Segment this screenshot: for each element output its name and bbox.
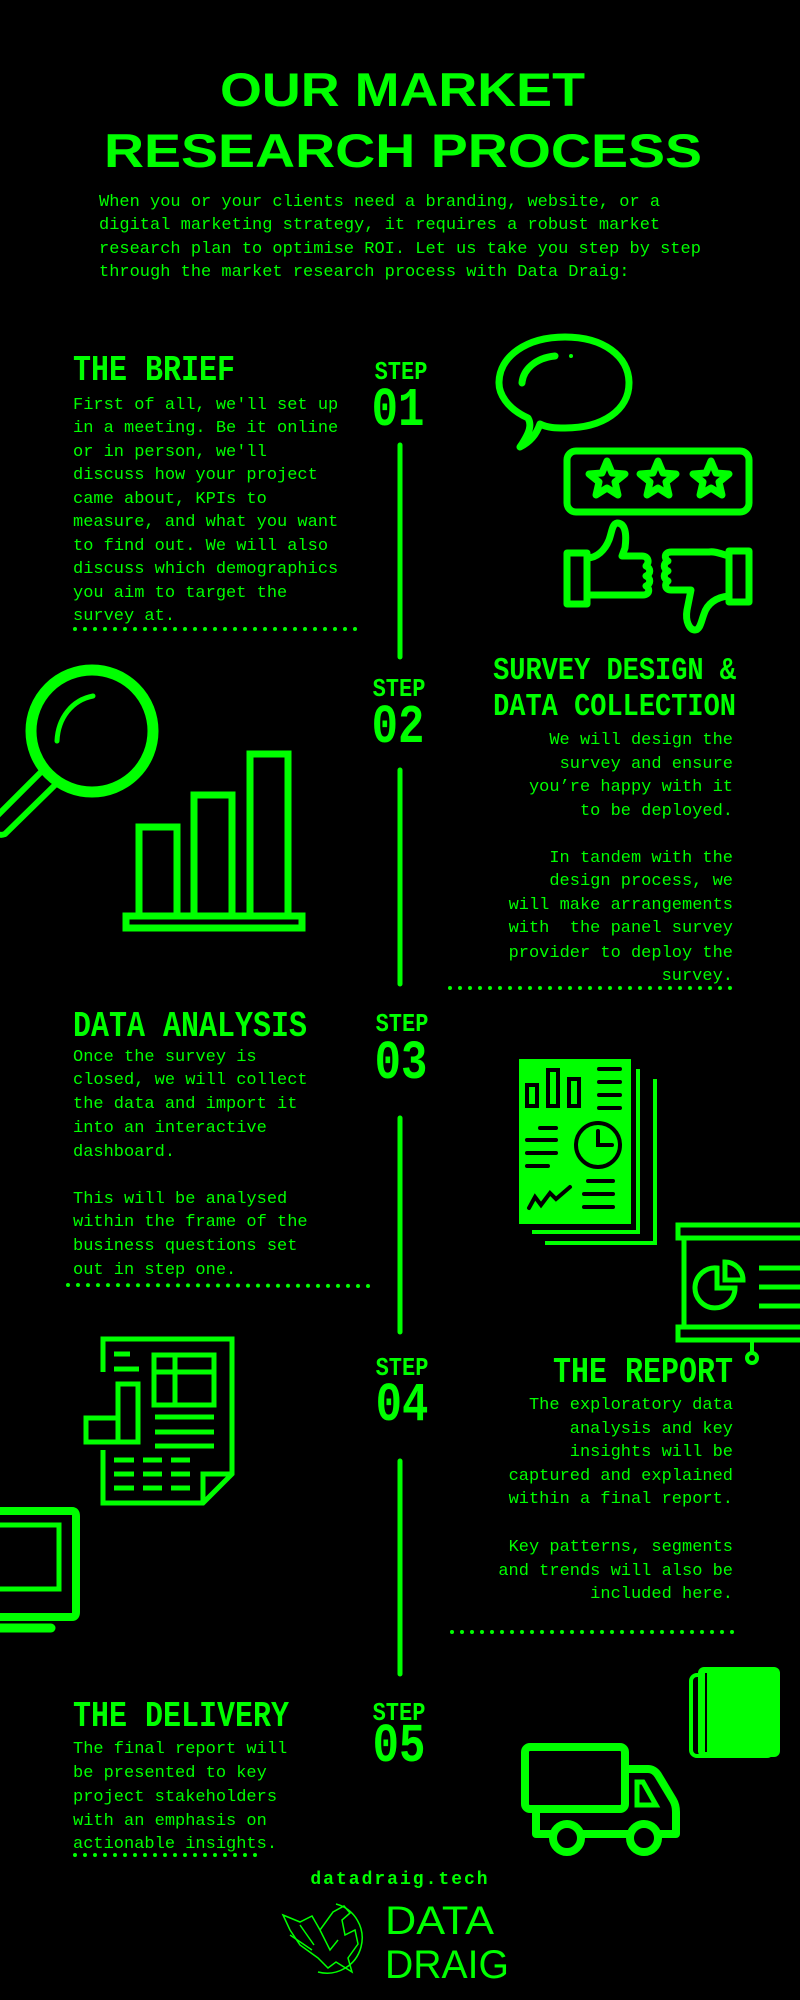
step 2 text: you’re happy with it <box>529 778 733 797</box>
title: RESEARCH PROCESS <box>104 124 702 177</box>
step 4 text: analysis and key <box>570 1420 733 1439</box>
step 5 text: with an emphasis on <box>73 1812 267 1831</box>
step 4 text: within a final report. <box>509 1490 733 1509</box>
step 2 text: design process, we <box>549 872 733 891</box>
step 1 text: to find out. We will also <box>73 537 328 556</box>
step 4 text: included here. <box>590 1585 733 1604</box>
step 3 label: STEP <box>376 1011 428 1040</box>
step 1 text: in a meeting. Be it online <box>73 419 338 438</box>
step 5 text: project stakeholders <box>73 1788 277 1807</box>
step 2 text: We will design the <box>549 731 733 750</box>
step 1 heading: THE BRIEF <box>73 350 235 391</box>
step 4 label: STEP <box>376 1355 428 1384</box>
icon: dragon emblem <box>283 1904 362 1973</box>
step 2 heading <box>493 653 737 725</box>
step 2 text: will make arrangements <box>509 896 733 915</box>
step 4 text: Key patterns, segments <box>509 1538 733 1557</box>
step 3 text: the data and import it <box>73 1095 297 1114</box>
step 5 heading: THE DELIVERY <box>73 1696 289 1737</box>
step 2 text: with the panel survey <box>509 919 733 938</box>
icon: bar chart <box>126 754 302 928</box>
step 3 text: This will be analysed <box>73 1190 287 1209</box>
step 5 text: actionable insights. <box>73 1835 277 1854</box>
step 3 label: 03 <box>375 1033 427 1095</box>
step 4 label: 04 <box>376 1375 428 1437</box>
step 3 text: closed, we will collect <box>73 1071 308 1090</box>
intro text: research plan to optimise ROI. Let us take you step by step <box>99 240 701 259</box>
step 5 label: 05 <box>373 1716 425 1778</box>
step 2 label: 02 <box>372 697 424 759</box>
step 2 heading: DATA COLLECTION <box>493 689 736 725</box>
step 1 text: or in person, we'll <box>73 443 267 462</box>
step 2 label: STEP <box>373 676 425 705</box>
icon: magnifier <box>0 670 153 835</box>
step 1 text: discuss how your project <box>73 466 318 485</box>
step 1 text: survey at. <box>73 607 175 626</box>
step 3 text: into an interactive <box>73 1119 267 1138</box>
step 3 text: business questions set <box>73 1237 297 1256</box>
step 1 text: came about, KPIs to <box>73 490 267 509</box>
icon: monitor <box>0 1511 76 1628</box>
step 2 text: In tandem with the <box>549 849 733 868</box>
icon: truck <box>525 1747 676 1852</box>
icon: dashboard report <box>519 1059 655 1243</box>
step 1 label: 01 <box>372 380 424 442</box>
title <box>104 63 702 177</box>
step 4 text: captured and explained <box>509 1467 733 1486</box>
step 3 heading: DATA ANALYSIS <box>73 1006 307 1047</box>
step 2 text: to be deployed. <box>580 802 733 821</box>
icon: report document <box>86 1339 232 1503</box>
step 3 text: out in step one. <box>73 1261 236 1280</box>
icon: speech bubble <box>499 337 629 447</box>
step 3 text: Once the survey is <box>73 1048 257 1067</box>
step 1 text: discuss which demographics <box>73 560 338 579</box>
step 2 heading: SURVEY DESIGN & <box>493 653 737 689</box>
intro text: digital marketing strategy, it requires a robust market <box>99 216 660 235</box>
icon: folder <box>691 1667 780 1757</box>
step 3 text: within the frame of the <box>73 1213 308 1232</box>
icon: star rating <box>567 451 749 512</box>
icon: presentation board <box>678 1225 800 1363</box>
step 2 text: survey. <box>662 967 733 986</box>
logo <box>283 1899 509 1987</box>
step 2 text: survey and ensure <box>560 755 733 774</box>
intro text: When you or your clients need a branding, website, or a <box>99 193 660 212</box>
step 5 text: The final report will <box>73 1740 287 1759</box>
footer url: datadraig.tech <box>310 1870 490 1890</box>
step 1 text: measure, and what you want <box>73 513 338 532</box>
intro text: through the market research process with Data Draig: <box>99 263 630 282</box>
step 5 text: be presented to key <box>73 1764 267 1783</box>
step 1 text: you aim to target the <box>73 584 287 603</box>
step 4 text: The exploratory data <box>529 1396 733 1415</box>
icon: thumbs up and down <box>567 523 749 630</box>
logo wordmark: DRAIG <box>385 1943 509 1987</box>
step 2 text: provider to deploy the <box>509 944 733 963</box>
step 1 label: STEP <box>375 359 427 388</box>
step 1 text: First of all, we'll set up <box>73 396 338 415</box>
logo wordmark: DATA <box>385 1899 494 1943</box>
step 5 label: STEP <box>373 1700 425 1729</box>
step 3 text: dashboard. <box>73 1143 175 1162</box>
step 4 text: and trends will also be <box>498 1562 733 1581</box>
step 4 text: insights will be <box>570 1443 733 1462</box>
step 4 heading: THE REPORT <box>553 1352 733 1393</box>
title: OUR MARKET <box>220 63 585 116</box>
